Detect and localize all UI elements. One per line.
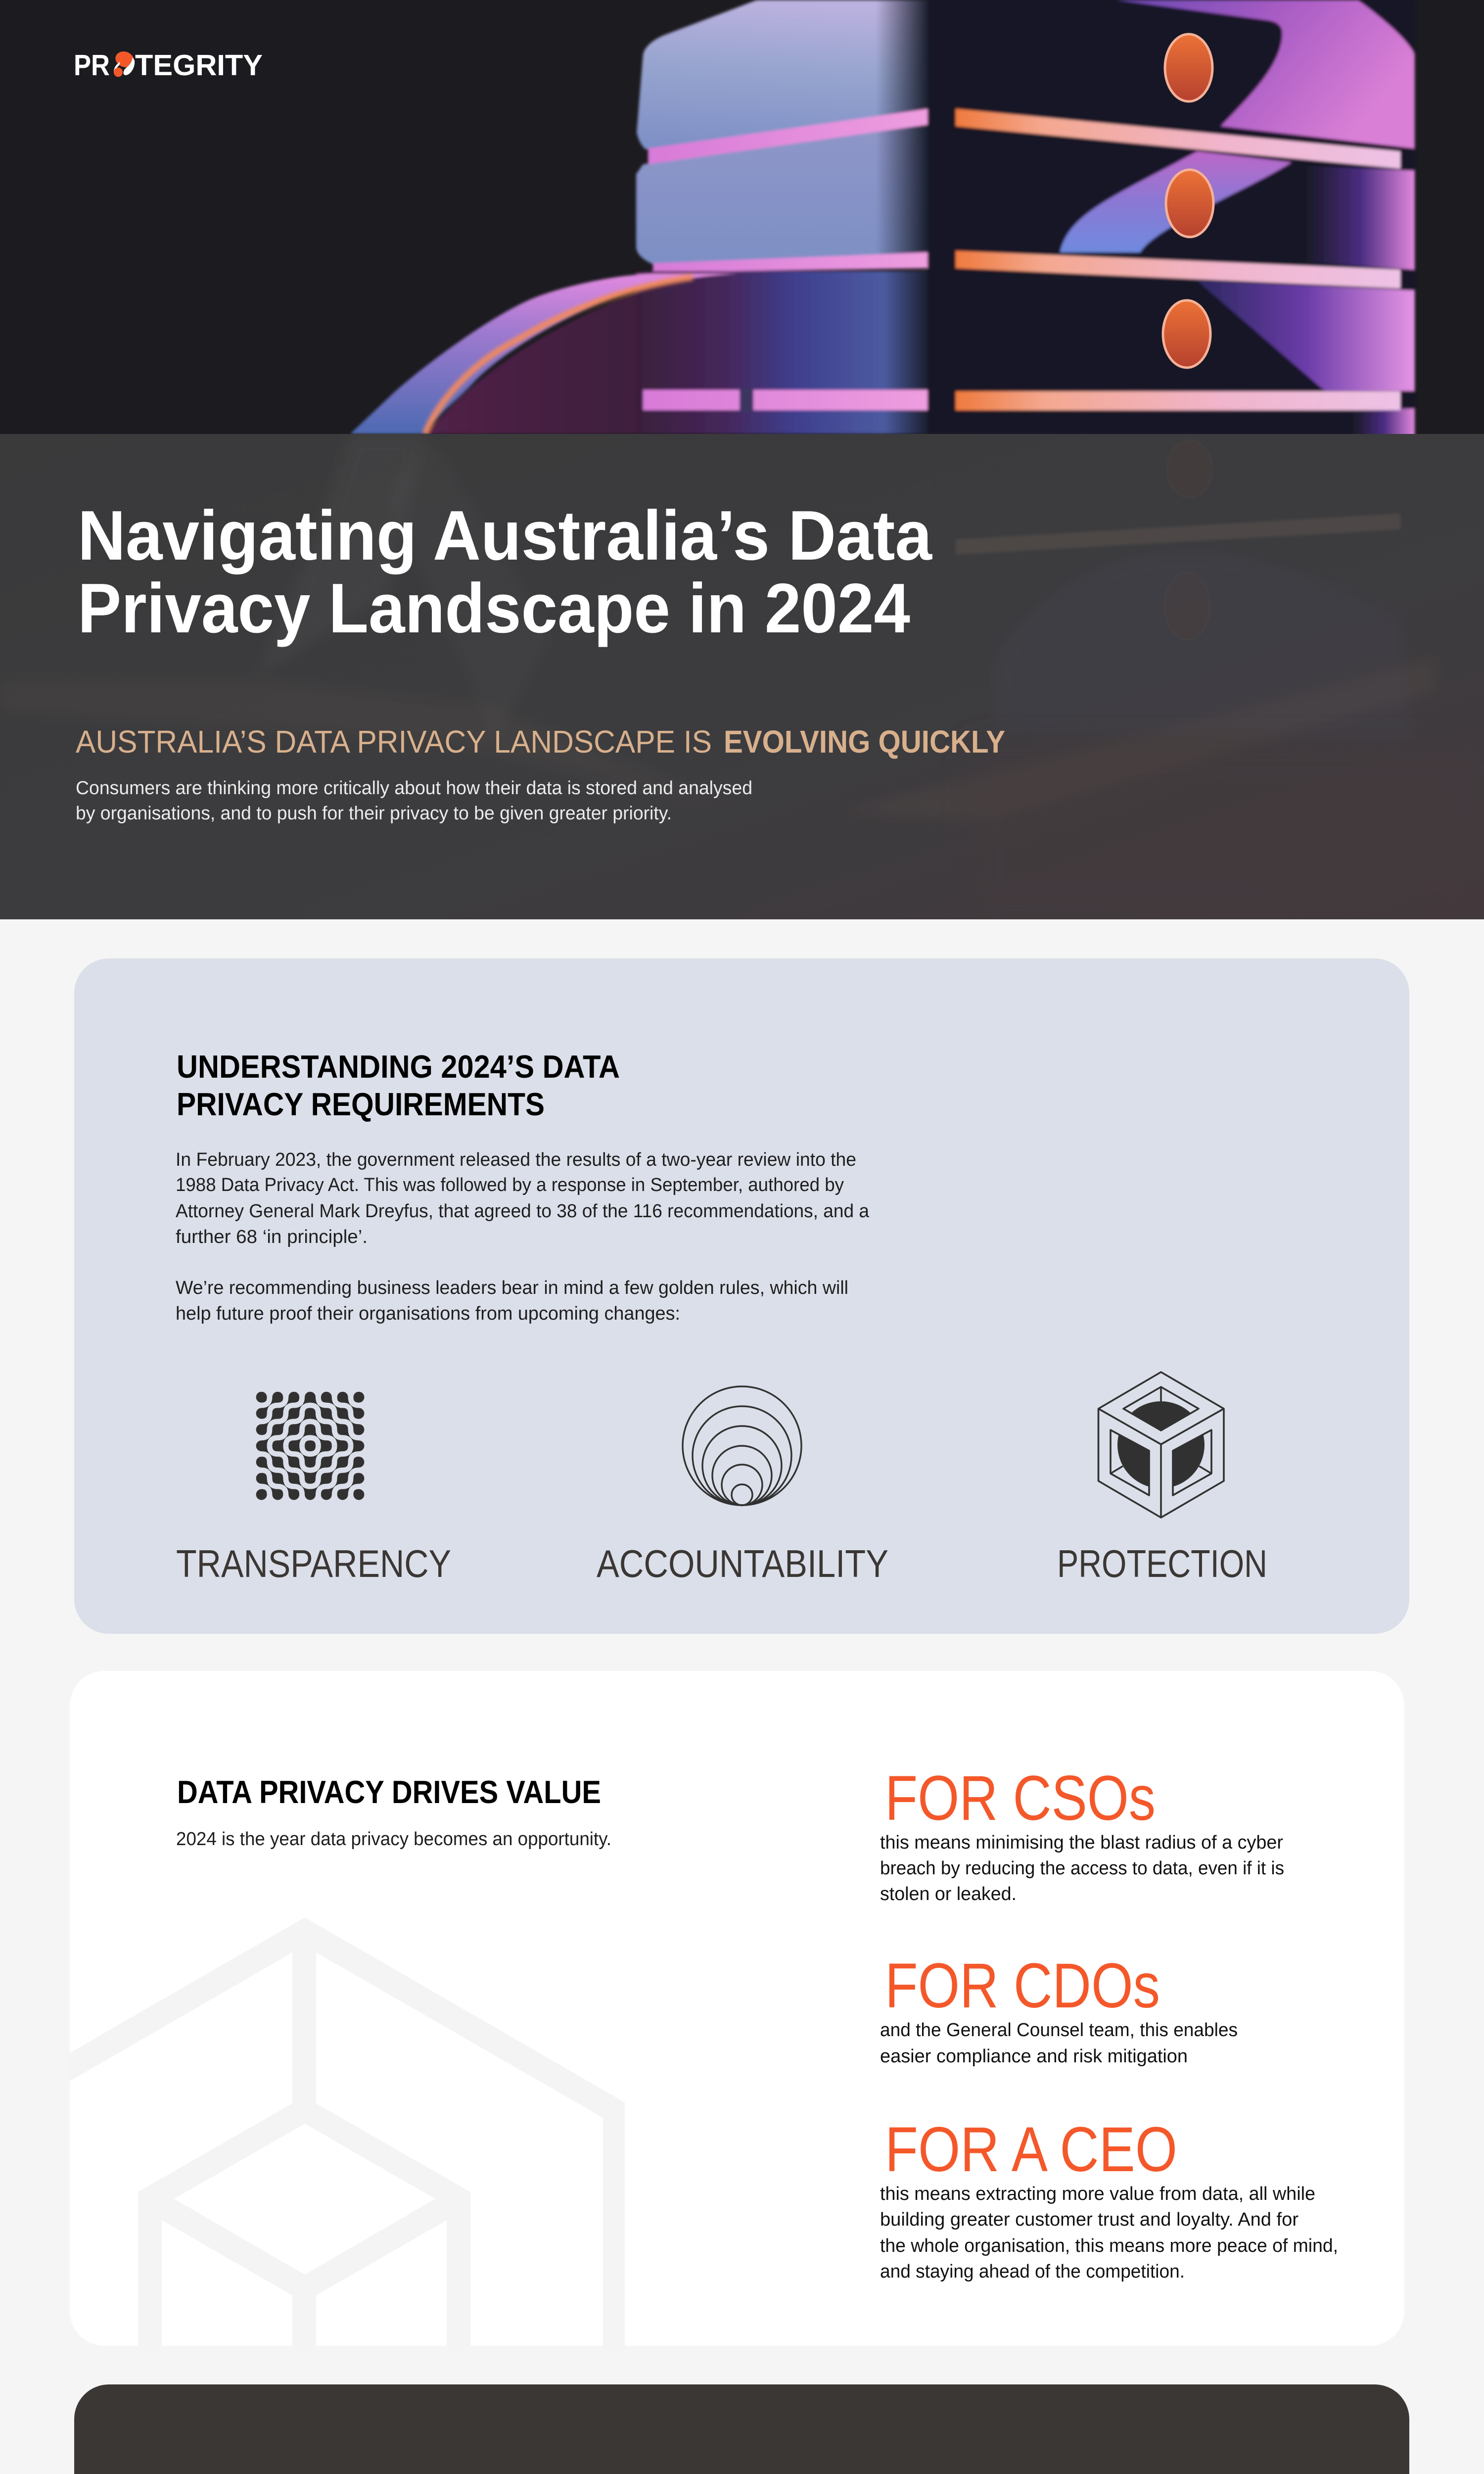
hero intro text: by organisations, and to push for their privacy to be given greater priority. (76, 803, 672, 824)
block: for CSOs: stolen or leaked. (880, 1884, 1017, 1904)
block: for a CEO: this means extracting more value from data, all while (880, 2184, 1315, 2204)
block: for a CEO (880, 2114, 1338, 2282)
panel: data privacy drives value (70, 1671, 1404, 2346)
icon: protection cube (1098, 1372, 1224, 1518)
hero title (78, 496, 932, 648)
value intro text: 2024 is the year data privacy becomes an opportunity. (176, 1829, 611, 1850)
heading: data privacy drives value: DATA PRIVACY DRIVES VALUE (177, 1774, 601, 1810)
block: for CDOs: FOR CDOs (885, 1951, 1160, 2021)
hero intro text: Consumers are thinking more critically about how their data is stored and analysed (76, 778, 752, 799)
requirements body text: We’re recommending business leaders bear in mind a few golden rules, which will (176, 1278, 848, 1298)
hero image: orange server lights (1163, 34, 1213, 368)
hero subheading (76, 730, 1005, 759)
hero title: Navigating Australia’s Data (78, 496, 932, 575)
requirements body text: Attorney General Mark Dreyfus, that agreed to 38 of the 116 recommendations, and a (176, 1201, 870, 1222)
panel: understanding requirements (74, 958, 1409, 1634)
requirements body text: 1988 Data Privacy Act. This was followed by a response in September, authored by (176, 1175, 844, 1195)
logo: Protegrity: TEGRITY (135, 49, 263, 82)
block: for CSOs: this means minimising the blast radius of a cyber (880, 1832, 1283, 1853)
logo: Protegrity: PR (74, 49, 110, 82)
block: for CSOs: breach by reducing the access to data, even if it is (880, 1858, 1284, 1879)
hero intro text (76, 778, 752, 824)
label: transparency: TRANSPARENCY (176, 1542, 451, 1585)
requirements body text: help future proof their organisations from upcoming changes: (176, 1303, 680, 1324)
block: for CSOs: FOR CSOs (885, 1763, 1156, 1834)
panel: data privacy opportunity (74, 2384, 1409, 2474)
block: for CDOs: easier compliance and risk mitigation (880, 2046, 1188, 2067)
heading: understanding 2024's requirements (177, 1048, 620, 1122)
hero title: Privacy Landscape in 2024 (78, 569, 910, 648)
block: for a CEO: and staying ahead of the competition. (880, 2261, 1185, 2282)
block: for a CEO: FOR A CEO (885, 2114, 1177, 2185)
hero banner (0, 0, 1484, 919)
hero subheading: AUSTRALIA’S DATA PRIVACY LANDSCAPE IS (76, 724, 712, 760)
label: protection: PROTECTION (1057, 1542, 1267, 1585)
block: for CDOs (880, 1951, 1238, 2067)
requirements body text: further 68 ‘in principle’. (176, 1227, 368, 1247)
heading: understanding 2024's requirements: UNDERSTANDING 2024’S DATA (177, 1048, 620, 1085)
icon: transparency pattern (255, 1391, 366, 1501)
logo: Protegrity (75, 51, 262, 77)
requirements body text (176, 1149, 870, 1324)
block: for CDOs: and the General Counsel team, this enables (880, 2020, 1238, 2041)
block: for a CEO: building greater customer trust and loyalty. And for (880, 2209, 1298, 2230)
block: for CSOs (880, 1763, 1284, 1904)
watermark cube outline (70, 1917, 625, 2346)
label: accountability: ACCOUNTABILITY (597, 1542, 888, 1585)
hero translucent overlay (0, 434, 1484, 919)
block: for a CEO: the whole organisation, this means more peace of mind, (880, 2236, 1338, 2256)
requirements body text: In February 2023, the government released the results of a two-year review into the (176, 1149, 856, 1170)
hero image: glowing server stack (350, 0, 1415, 438)
hero subheading: EVOLVING QUICKLY (724, 724, 1005, 760)
heading: understanding 2024's requirements: PRIVACY REQUIREMENTS (177, 1086, 545, 1122)
icon: accountability nested circles (683, 1386, 801, 1505)
